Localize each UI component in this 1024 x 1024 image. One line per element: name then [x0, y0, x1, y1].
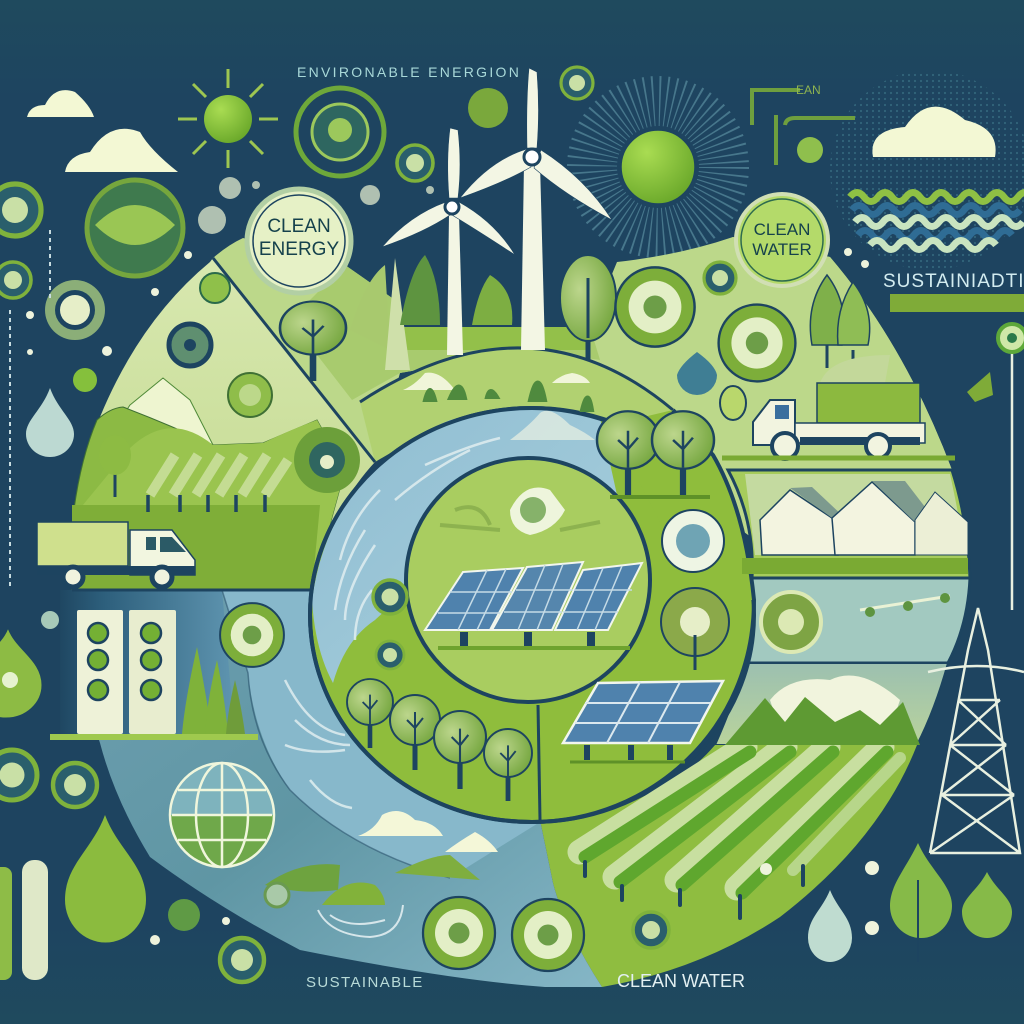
panel: main circular landscape — [50, 237, 970, 987]
label: sustainable right: SUSTAINIADTI — [883, 271, 1024, 292]
pipes top right — [752, 90, 855, 165]
farm rows — [580, 747, 900, 918]
panel: left mountain wedge — [72, 258, 375, 590]
ring green bulge — [610, 410, 754, 600]
irrigation icons — [761, 592, 950, 652]
badge: clean water: CLEAN — [754, 220, 810, 239]
hills behind turbines — [350, 255, 512, 370]
clouds — [27, 90, 996, 172]
river crescent — [312, 409, 617, 683]
dashed lines left — [10, 230, 50, 590]
ring trees — [347, 411, 714, 801]
field rows left — [150, 455, 288, 495]
badge: clean water: WATER — [752, 240, 812, 259]
inner emblem — [440, 488, 600, 535]
solar panels center — [425, 562, 642, 648]
truck upper right — [722, 355, 955, 459]
top trees — [99, 255, 616, 497]
panel: mountains band — [715, 663, 948, 745]
panel: lower-left blue — [72, 590, 602, 987]
panel: arc band — [360, 348, 700, 462]
right wedge trees — [810, 275, 870, 370]
label: clean water bottom: CLEAN WATER — [617, 971, 745, 991]
distant mountains and cloud — [725, 676, 920, 745]
title text: ENVIRONABLE ENERGION — [297, 64, 521, 80]
green band right — [890, 294, 1024, 312]
batteries — [77, 610, 176, 734]
divider line — [213, 258, 375, 462]
tiny dots — [26, 248, 879, 945]
globe — [170, 763, 274, 867]
pylon — [928, 608, 1024, 853]
drops — [0, 352, 1012, 962]
shelf under batteries — [50, 734, 258, 740]
panel: right wedge — [600, 237, 952, 540]
solar panel lower — [563, 681, 723, 762]
pale blobs near top — [198, 177, 434, 234]
badge: clean energy: CLEAN — [267, 216, 331, 237]
panel: irrigation band — [745, 578, 970, 663]
small badge near pipes — [797, 137, 823, 163]
ring outline — [310, 408, 754, 822]
waves top right — [850, 192, 1024, 250]
cloud in river — [510, 411, 595, 440]
halftone behind cloud — [830, 70, 1024, 270]
cylinders bottom left — [0, 860, 48, 980]
label: pipe text: EAN — [796, 83, 821, 97]
leaf cluster right — [967, 372, 993, 402]
sun left — [178, 69, 278, 168]
water streaks — [285, 438, 500, 808]
badge: clean energy: ENERGY — [259, 239, 339, 260]
badge: clean water — [736, 194, 828, 286]
pole and badge right — [998, 324, 1024, 610]
inner circle — [406, 458, 650, 702]
lower water hills and clouds — [265, 811, 498, 937]
badge: clean energy — [247, 189, 351, 293]
panel: upper hill wedge — [213, 237, 952, 470]
panel: farm field — [540, 745, 917, 987]
panel: ring — [310, 408, 754, 822]
label: sustainable bottom: SUSTAINABLE — [306, 974, 424, 991]
small icon badges — [0, 67, 795, 982]
houses — [742, 481, 968, 566]
panel: houses band — [728, 470, 970, 578]
band clouds and little trees — [403, 373, 592, 410]
sun right — [592, 101, 724, 233]
wind turbines — [382, 68, 612, 355]
truck left — [37, 522, 195, 587]
mountain peaks — [120, 378, 213, 445]
pines — [182, 647, 245, 734]
